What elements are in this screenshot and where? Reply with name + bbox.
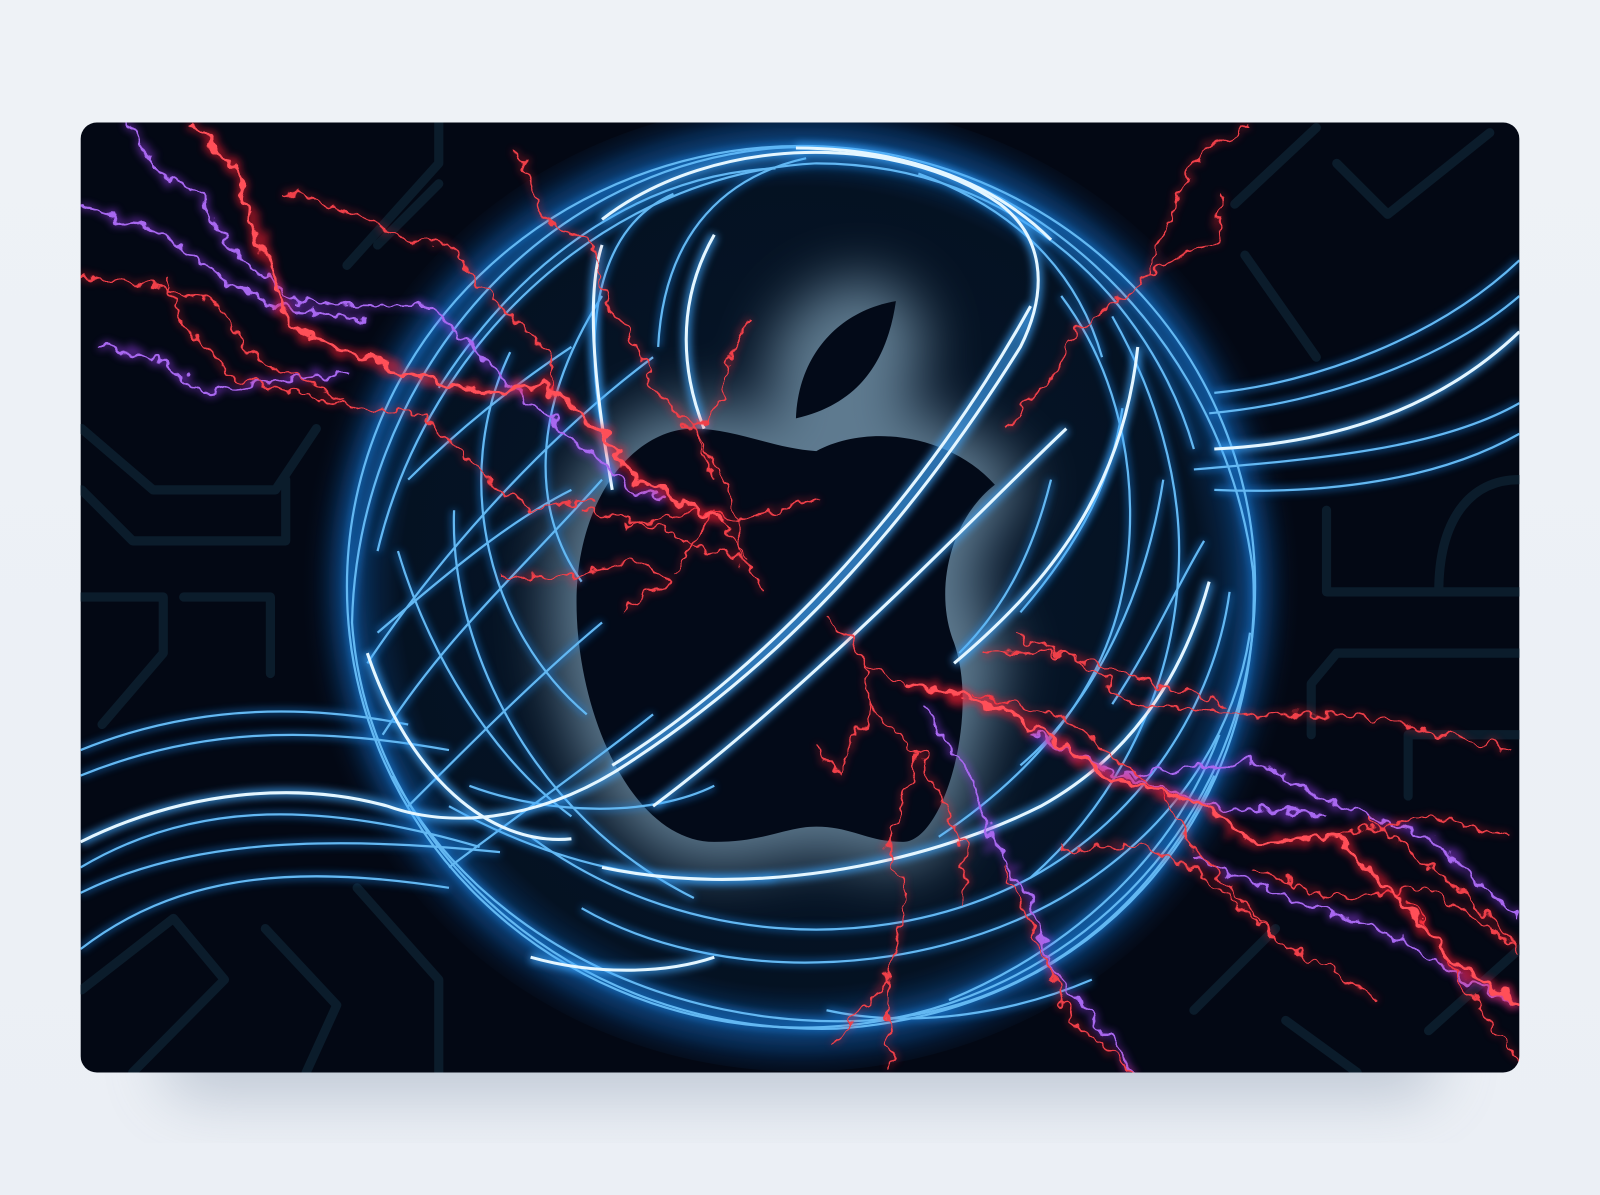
- red thin lightning: [81, 125, 1519, 1072]
- red main lightning: [190, 122, 1519, 1005]
- panel: illustration card: [81, 102, 1519, 1072]
- infographic illustration: [80, 122, 1520, 1130]
- white neon lines: [81, 148, 1519, 970]
- red thin lightning glow: [81, 125, 1519, 1072]
- white neon glow: [81, 148, 1519, 970]
- blue neon wire glow: [81, 146, 1519, 1029]
- apple glow: [577, 247, 995, 842]
- sphere rim glow: [347, 146, 1255, 1028]
- card shadow: [163, 1020, 1439, 1097]
- purple lightning: [81, 122, 1519, 1072]
- apple leaf: [796, 301, 896, 418]
- card background: [81, 122, 1519, 1072]
- red main lightning glow: [190, 122, 1519, 1005]
- apple logo silhouette: [577, 429, 995, 842]
- sphere halo: [301, 102, 1301, 1071]
- decorative circuit pattern: [82, 122, 1519, 1072]
- purple lightning glow: [81, 122, 1519, 1072]
- blue neon wires: [81, 146, 1519, 1029]
